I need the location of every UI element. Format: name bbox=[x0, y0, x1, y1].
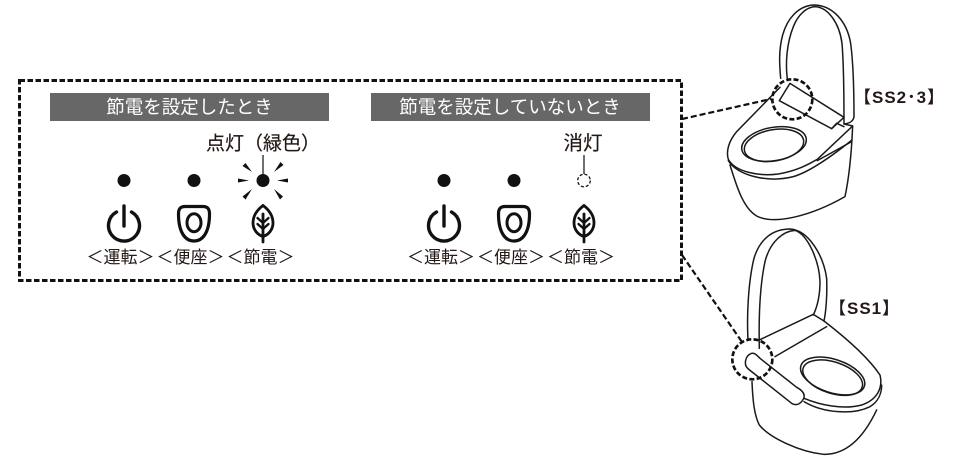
labels: unset state buttons: ＜運転＞ bbox=[407, 248, 475, 267]
bowl bbox=[730, 126, 853, 220]
illustration: SS1 toilet bbox=[732, 229, 882, 454]
labels: unset state buttons: ＜節電＞ bbox=[547, 248, 615, 267]
panel: power saving indicator states bbox=[20, 80, 682, 280]
seat bbox=[759, 314, 881, 407]
label: SS2-3: 【SS2･3】 bbox=[854, 88, 945, 107]
icon: seat bbox=[498, 206, 530, 241]
dashed frame bbox=[20, 80, 682, 280]
heading: power saving set bbox=[50, 93, 329, 121]
seat lower edge bbox=[728, 140, 852, 179]
indicator: seat lamp on bbox=[508, 174, 520, 187]
seat hole bbox=[796, 350, 869, 402]
dashed circle callout bbox=[772, 79, 812, 119]
labels: set state buttons: ＜運転＞ bbox=[86, 248, 154, 267]
heading: power saving not set bbox=[371, 93, 650, 121]
labels: set state buttons: ＜便座＞ bbox=[156, 248, 224, 267]
backrest lid bbox=[780, 5, 854, 124]
icon: leaf bbox=[574, 206, 594, 242]
seat hole bbox=[739, 122, 809, 166]
indicator: power lamp on bbox=[118, 174, 130, 187]
label: SS1: 【SS1】 bbox=[829, 299, 900, 318]
heading: power saving not set: 節電を設定していないとき bbox=[399, 96, 621, 118]
labels: unset state buttons: ＜便座＞ bbox=[477, 248, 545, 267]
backrest lid bbox=[748, 229, 827, 340]
illustration: SS2-3 toilet bbox=[727, 5, 854, 220]
icon: leaf bbox=[253, 206, 273, 242]
indicator: power lamp on bbox=[438, 174, 450, 187]
icon: power bbox=[108, 206, 140, 241]
icon: power bbox=[428, 206, 460, 241]
label: lit green: 点灯（緑色） bbox=[206, 132, 320, 154]
seat top bbox=[727, 87, 853, 175]
labels: unset state buttons bbox=[407, 248, 615, 267]
bowl bbox=[752, 382, 877, 454]
labels: set state buttons: ＜節電＞ bbox=[226, 248, 294, 267]
side control arm bbox=[745, 353, 804, 405]
labels: set state buttons bbox=[86, 248, 294, 267]
indicator: power saving lamp lit with rays bbox=[238, 155, 288, 200]
control panel bbox=[779, 83, 844, 129]
icon: seat bbox=[178, 206, 210, 241]
leader line to SS1 bbox=[682, 255, 742, 342]
label: off: 消灯 bbox=[563, 132, 603, 154]
indicator: power saving lamp off bbox=[578, 155, 590, 187]
leader line to SS2-3 bbox=[682, 99, 771, 119]
heading: power saving set: 節電を設定したとき bbox=[106, 96, 273, 118]
dashed circle callout bbox=[732, 339, 772, 379]
indicator: seat lamp on bbox=[188, 174, 200, 187]
